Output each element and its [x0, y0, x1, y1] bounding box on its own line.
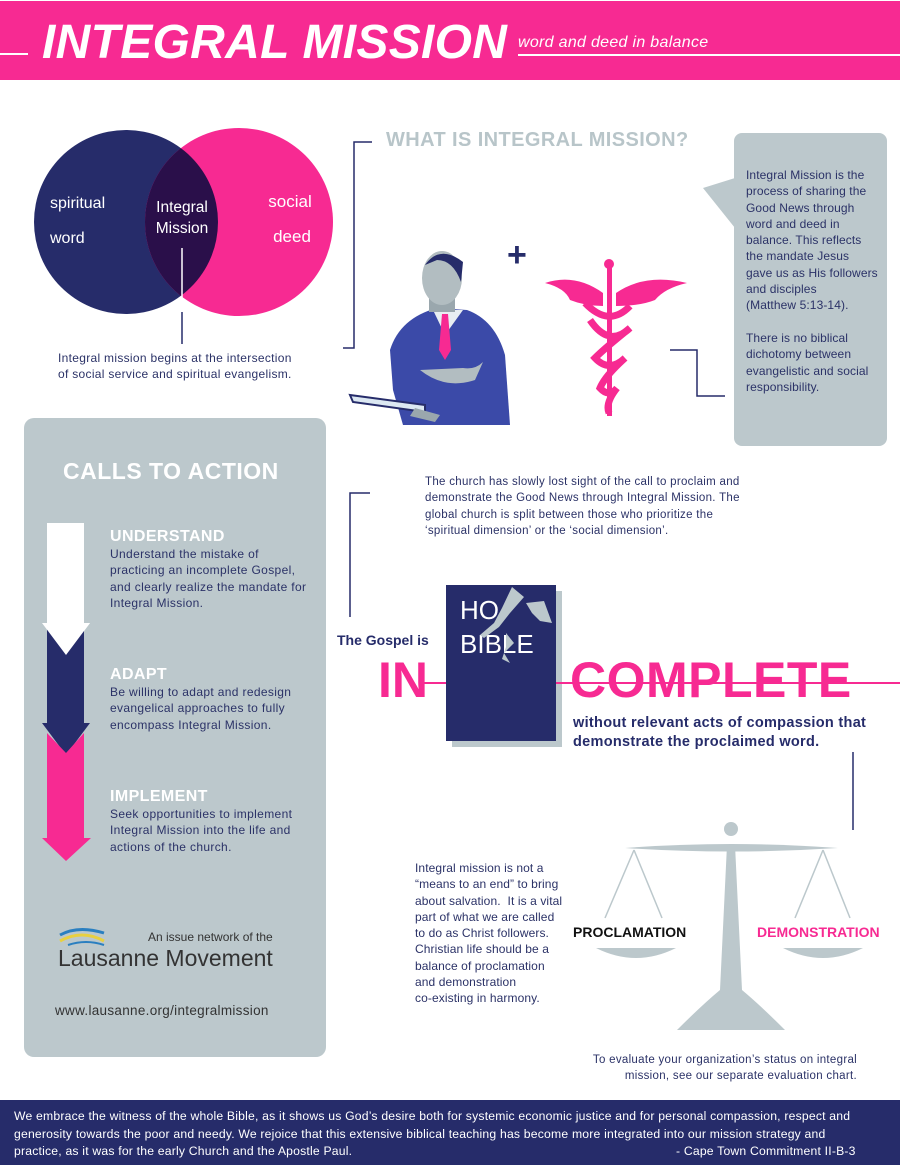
step: implement — [110, 788, 292, 854]
venn caption: Integral mission begins at the intersection — [58, 351, 292, 365]
footer quote band: We embrace the witness of the whole Bible, as it shows us God’s desire both for systemic economic justice and for personal compassion, respect and — [14, 1109, 850, 1123]
text: church lost sight: demonstrate the Good News through Integral Mission. The — [425, 492, 740, 504]
step: adapt: encompass Integral Mission. — [110, 718, 272, 732]
heading: CALLS TO ACTION — [63, 458, 279, 484]
icon: caduceus — [545, 259, 687, 416]
text: integral mission is not: about salvation. It is a vital — [415, 894, 562, 908]
heading: what is integral mission: WHAT IS INTEGRAL MISSION? — [386, 129, 689, 151]
label: proclamation: PROCLAMATION — [573, 924, 686, 940]
step: understand: and clearly realize the mandate for — [110, 580, 306, 594]
step: implement: IMPLEMENT — [110, 788, 208, 805]
text: without relevant acts: demonstrate the proclaimed word. — [573, 734, 819, 750]
callout box: the mandate Jesus — [746, 249, 849, 263]
title: INTEGRAL MISSION — [42, 16, 507, 69]
url: www.lausanne.org/integralmission — [55, 1003, 269, 1018]
panel: calls to action — [24, 418, 326, 1057]
venn diagram: Integral — [156, 199, 208, 216]
text: evaluate: mission, see our separate evaluation chart. — [625, 1070, 857, 1082]
step: implement: Seek opportunities to implement — [110, 807, 292, 821]
text: integral mission is not: co-existing in harmony. — [415, 991, 540, 1005]
callout box: and disciples — [746, 282, 817, 296]
step: implement: actions of the church. — [110, 840, 232, 854]
step: understand: practicing an incomplete Gospel, — [110, 563, 295, 577]
step: adapt: evangelical approaches to fully — [110, 701, 285, 715]
callout box: (Matthew 5:13-14). — [746, 298, 849, 312]
icon: preacher man — [348, 251, 510, 425]
callout box: Integral Mission is the — [746, 168, 864, 182]
text: IN: IN — [378, 652, 428, 708]
callout box: evangelistic and social — [746, 364, 868, 378]
icon: broken bible — [446, 585, 562, 747]
logo: lausanne: An issue network of the — [148, 930, 273, 944]
callout box: balance. This reflects — [746, 233, 861, 247]
callout box: responsibility. — [746, 380, 819, 394]
footer quote band: generosity towards the poor and needy. We rejoice that this extensive biblical teaching has become more integrated into our mission strategy and — [14, 1126, 826, 1140]
step: adapt: ADAPT — [110, 666, 167, 683]
text: the gospel is: The Gospel is — [337, 632, 429, 648]
callout box — [703, 133, 887, 446]
text: COMPLETE: COMPLETE — [570, 652, 852, 708]
footer quote band — [0, 1100, 900, 1165]
text: church lost sight: global church is split between those who prioritize the — [425, 509, 713, 521]
venn diagram: spiritual — [50, 195, 105, 212]
venn diagram: social — [268, 192, 312, 211]
step: implement: Integral Mission into the life and — [110, 823, 291, 837]
text: evaluate — [593, 1054, 857, 1082]
text: integral mission is not: Integral mission is not a — [415, 861, 544, 875]
callout box: There is no biblical — [746, 331, 848, 345]
text: integral mission is not: balance of proclamation — [415, 959, 545, 973]
step: understand: UNDERSTAND — [110, 528, 225, 545]
venn diagram: deed — [273, 227, 311, 246]
subtitle: word and deed in balance — [518, 34, 708, 51]
text: church lost sight — [425, 476, 740, 537]
venn caption — [58, 351, 292, 381]
footer quote band: practice, as it was for the early Church and the Apostle Paul. — [14, 1144, 352, 1158]
icon: balance scale — [596, 822, 863, 1030]
icon: broken bible: HO — [460, 595, 499, 625]
arrows — [42, 523, 91, 861]
step: adapt — [110, 666, 291, 732]
label: demonstration: DEMONSTRATION — [757, 924, 880, 940]
venn caption: of social service and spiritual evangelism. — [58, 367, 292, 381]
callout box: word and deed in — [746, 217, 840, 231]
venn diagram: word — [49, 230, 85, 247]
step: understand: Understand the mistake of — [110, 547, 259, 561]
venn diagram — [34, 128, 333, 344]
header band — [0, 1, 900, 80]
text: integral mission is not: “means to an end” to bring — [415, 877, 558, 891]
icon: plus: + — [507, 236, 527, 274]
text: church lost sight: ‘spiritual dimension’ or the ‘social dimension’. — [425, 525, 668, 537]
text: church lost sight: The church has slowly lost sight of the call to proclaim and — [425, 476, 740, 488]
callout box: dichotomy between — [746, 347, 851, 361]
text: integral mission is not: Christian life should be a — [415, 942, 549, 956]
callout box: gave us as His followers — [746, 266, 878, 280]
logo: lausanne: Lausanne Movement — [58, 945, 273, 971]
text: integral mission is not: and demonstration — [415, 975, 516, 989]
icon: broken bible: BIBLE — [460, 629, 534, 659]
callout box: process of sharing the — [746, 184, 866, 198]
footer quote band: - Cape Town Commitment II-B-3 — [676, 1144, 856, 1158]
text: integral mission is not: part of what we are called — [415, 910, 554, 924]
venn diagram: Mission — [156, 220, 208, 237]
text: without relevant acts: without relevant acts of compassion that — [573, 715, 866, 731]
callout box: Good News through — [746, 201, 854, 215]
text: integral mission is not: to do as Christ followers. — [415, 926, 549, 940]
text: integral mission is not — [415, 861, 562, 1005]
text: without relevant acts — [573, 715, 866, 750]
step: understand — [110, 528, 306, 610]
step: understand: Integral Mission. — [110, 596, 203, 610]
logo: lausanne — [58, 928, 273, 971]
step: adapt: Be willing to adapt and redesign — [110, 685, 291, 699]
text: evaluate: To evaluate your organization’s status on integral — [593, 1054, 857, 1066]
